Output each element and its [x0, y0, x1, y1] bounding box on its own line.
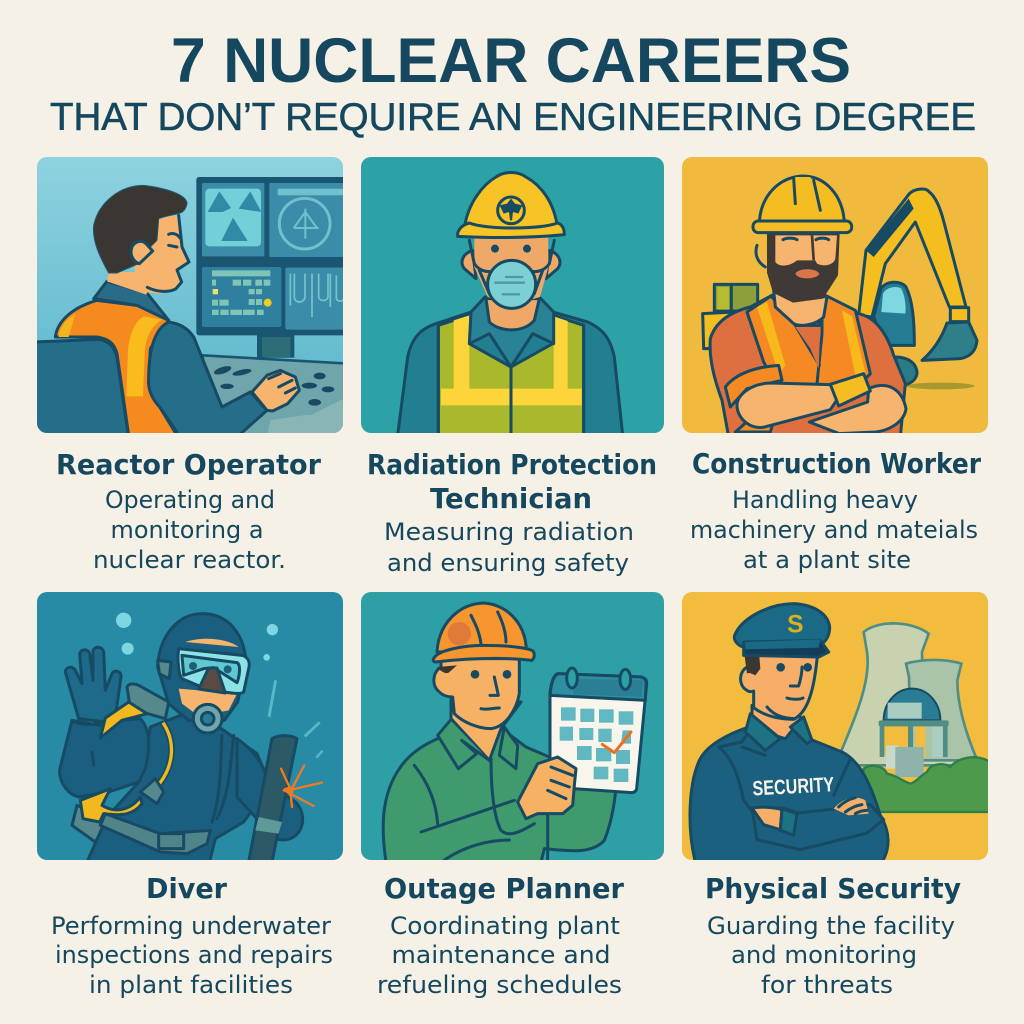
crossed arms — [752, 805, 884, 850]
title: 7 NUCLEAR CAREERS — [171, 26, 851, 96]
title: THAT DON’T REQUIRE AN ENGINEERING DEGREE — [50, 96, 976, 139]
helmet badge — [498, 197, 524, 224]
neck — [774, 290, 827, 325]
spark — [281, 765, 322, 807]
face — [756, 245, 765, 267]
caption: physical security: Physical Security — [705, 872, 961, 905]
caption: diver: in plant facilities — [89, 971, 293, 999]
uniform label: SECURITY — [752, 773, 835, 800]
neck and collar — [469, 297, 554, 367]
excavator — [703, 189, 977, 389]
caption: physical security — [705, 872, 961, 999]
crossed arms — [809, 385, 906, 434]
panel: outage planner — [361, 592, 664, 862]
caption: diver: Diver — [146, 872, 227, 905]
ears and face — [462, 250, 560, 279]
shirt — [710, 295, 905, 437]
caption: reactor operator: nuclear reactor. — [93, 546, 286, 574]
caption: physical security: for threats — [761, 971, 893, 999]
worker figure — [710, 176, 906, 437]
caption: reactor operator — [56, 448, 321, 574]
uniform — [690, 712, 888, 862]
face — [130, 215, 189, 294]
caption: radiation protection technician — [367, 448, 657, 577]
desk and keyboard — [202, 355, 349, 437]
caption: diver: Performing underwater — [51, 912, 331, 940]
caption: reactor operator: Reactor Operator — [56, 448, 321, 481]
caption: reactor operator: monitoring a — [110, 516, 264, 544]
helmet — [759, 176, 844, 222]
caption: physical security: Guarding the facility — [707, 912, 955, 940]
hood and face — [158, 614, 246, 720]
caption: construction worker: at a plant site — [743, 546, 911, 574]
tube — [249, 736, 297, 862]
caption: outage planner: refueling schedules — [377, 971, 622, 999]
belt — [100, 814, 210, 854]
caption: construction worker: Construction Worker — [692, 447, 981, 480]
chair — [34, 339, 129, 438]
caption: radiation protection technician: and ensuring safety — [387, 549, 629, 577]
torso — [86, 714, 264, 860]
panel: diver — [37, 592, 343, 872]
raised arm — [60, 719, 149, 797]
vest — [438, 315, 584, 435]
shirt — [383, 720, 616, 862]
cap — [734, 604, 830, 647]
caption: construction worker — [690, 447, 981, 574]
jacket — [398, 312, 623, 435]
title — [50, 26, 976, 139]
planner figure — [383, 603, 647, 862]
caption: radiation protection technician: Measuring radiation — [384, 518, 634, 546]
jacket arm — [149, 322, 267, 437]
cooling towers — [835, 623, 994, 812]
mask — [178, 649, 249, 693]
bubbles — [116, 613, 323, 758]
technician figure — [398, 172, 623, 435]
caption: construction worker: machinery and mateials — [690, 516, 978, 544]
neck and collar — [752, 704, 800, 739]
hair — [93, 185, 187, 273]
mask — [488, 260, 536, 308]
head — [741, 652, 817, 719]
helmet — [437, 603, 526, 652]
neck — [451, 699, 521, 760]
glove — [65, 647, 121, 722]
gray tank — [127, 684, 169, 719]
caption: diver — [51, 872, 333, 999]
caption: diver: inspections and repairs — [55, 941, 333, 969]
caption: radiation protection technician: Radiation Protection — [367, 448, 657, 481]
yellow air pack — [100, 702, 147, 738]
caption: outage planner — [377, 872, 624, 999]
guard figure — [690, 604, 888, 862]
calendar — [550, 668, 647, 793]
caption: reactor operator: Operating and — [105, 486, 275, 514]
helmet — [464, 172, 558, 229]
caption: radiation protection technician: Technician — [430, 482, 592, 515]
hand — [518, 757, 576, 819]
head — [434, 659, 519, 729]
panel: physical security — [682, 592, 994, 862]
caption: physical security: and monitoring — [731, 941, 917, 969]
operator figure — [34, 185, 299, 438]
caption: outage planner: Coordinating plant — [390, 912, 620, 940]
cap badge: S — [787, 612, 804, 639]
hand — [252, 370, 299, 411]
safety vest — [735, 295, 870, 432]
caption: outage planner: maintenance and — [392, 941, 610, 969]
regulator — [193, 704, 222, 733]
panel: radiation technician — [361, 157, 664, 435]
caption: outage planner: Outage Planner — [384, 872, 624, 905]
right arm — [237, 739, 303, 840]
panel: reactor operator — [34, 157, 350, 438]
caption: construction worker: Handling heavy — [732, 486, 918, 514]
panel: construction worker — [682, 157, 988, 437]
icon: monitors — [196, 177, 350, 358]
diver figure — [60, 614, 322, 872]
